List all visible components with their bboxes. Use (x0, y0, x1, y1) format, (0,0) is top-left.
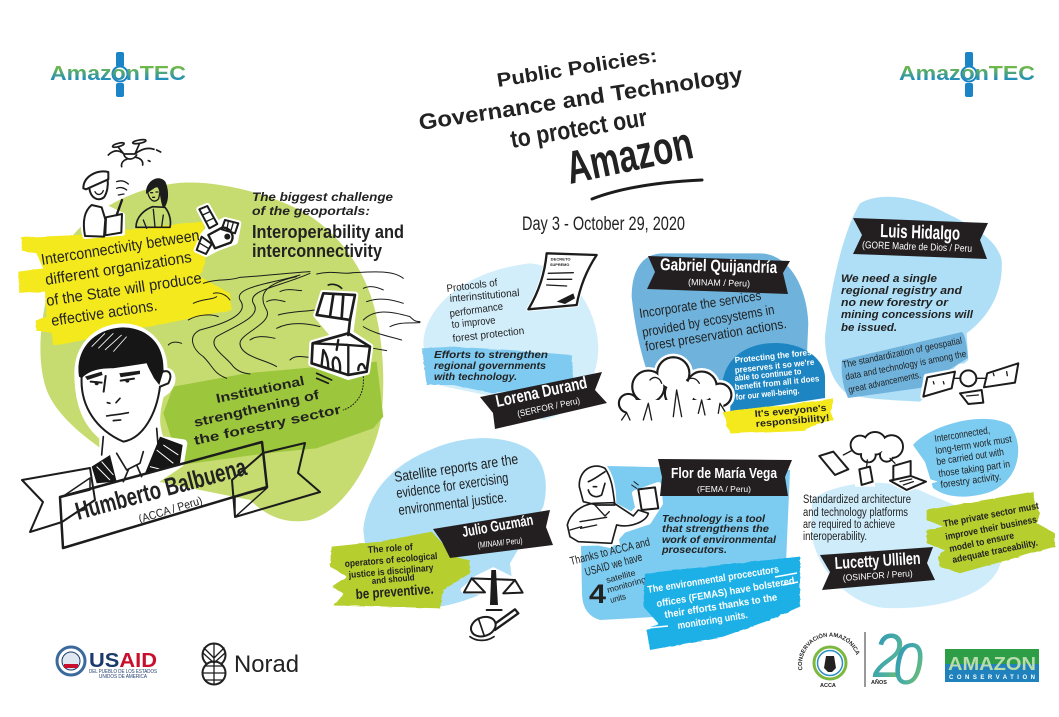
highlight: standardization: The standardization of geospatial (841, 335, 963, 371)
logo: Conservación Amazónica ACCA (798, 622, 923, 697)
panel: Lucetty Ullilen (803, 419, 1055, 608)
logo: Conservación Amazónica ACCA: 0 (893, 632, 923, 697)
yellow highlight: responsibility: It's everyone's (754, 403, 827, 420)
name banner (433, 510, 553, 558)
dark blue callout (722, 343, 825, 412)
landscape with rivers (168, 272, 420, 378)
blue blob (632, 253, 808, 420)
name: Humberto Balbuena (72, 453, 250, 526)
icon: decree document: SUPREMO (550, 263, 570, 267)
highlight: standardization: great advancements. (847, 370, 922, 396)
logo: Conservación Amazónica ACCA: AÑOS (871, 679, 887, 686)
highlight: standardization (841, 332, 968, 398)
ribbon banner (22, 442, 320, 548)
icon: satellite (923, 363, 1018, 404)
text: protocols: Protocols of (446, 277, 498, 295)
name: Humberto Balbuena: (ACCA / Peru) (137, 495, 204, 526)
name banner: Julio Guzmán (461, 512, 535, 541)
logo: Conservación Amazónica ACCA: 2 (872, 622, 903, 691)
icon: cloud and connected devices (819, 432, 927, 490)
logo: AmazonTEC right: AmazonTEC (899, 63, 1035, 85)
text: protocols: interinstitutional (449, 287, 520, 305)
green highlight: private sector: improve their business (944, 514, 1038, 543)
text: standardized architecture: and technology platforms (803, 507, 908, 519)
green blob background (40, 182, 383, 521)
cyan highlight: environmental offices: monitoring units. (677, 610, 749, 632)
yellow highlight: responsibility (723, 398, 833, 433)
text: protocols: to improve (451, 314, 496, 331)
logo: AmazonTEC left: AmazonTEC (50, 63, 186, 85)
panel: Humberto Balbuena (18, 139, 420, 548)
text: institutional strengthening: Institutional (215, 373, 306, 406)
text: technology tool: work of environmental (662, 535, 776, 546)
name banner: (MINAM/ Peru) (477, 535, 523, 550)
panel: Julio Guzmán (330, 438, 553, 640)
green highlight: ecological justice: and should (371, 572, 415, 586)
text: standardized architecture: interoperability. (803, 531, 867, 543)
text: satellite reports: evidence for exercising (395, 470, 509, 502)
name banner: (OSINFOR / Peru) (842, 568, 913, 583)
text: geoportals challenge (252, 192, 404, 261)
text: protecting the forest: Protecting the forest (734, 347, 815, 365)
cyan highlight: environmental offices: their efforts thanks to the (664, 592, 778, 621)
text: standardized architecture: are required to achieve (803, 519, 895, 531)
logo: USAID: DEL PUEBLO DE LOS ESTADOS (89, 669, 158, 675)
text: regional governments: Efforts to strengthen (434, 350, 548, 361)
name banner: (GORE Madre de Dios / Peru (862, 240, 972, 255)
text: standardized architecture (803, 494, 911, 543)
text: protecting the forest: for our well-being. (735, 385, 800, 402)
name banner: Flor de María Vega (671, 465, 778, 482)
logo: Amazon Conservation: CONSERVATION (949, 675, 1035, 681)
green highlight: private sector: model to ensure (948, 530, 1015, 555)
icon: gavel (468, 608, 518, 640)
icon: scales of justice (463, 570, 523, 610)
panel: Lorena Durand (422, 253, 607, 429)
text: protocols: performance (449, 301, 504, 320)
title: to protect our (508, 103, 649, 154)
text: protecting the forest: benefit from all it does (734, 373, 820, 392)
text: institutional strengthening: strengthening of (192, 387, 321, 430)
blue blob (581, 466, 790, 620)
text: technology tool: that strengthens the (662, 524, 769, 535)
dark green band (163, 362, 383, 465)
text: interconnected work (934, 425, 1013, 491)
text: interconnectivity statement (40, 227, 203, 330)
name banner (647, 255, 790, 294)
text: monitoring units: satellite (605, 567, 637, 585)
text: technology tool (661, 514, 776, 556)
text: monitoring units: 4 (589, 579, 606, 609)
name banner: (FEMA / Peru) (697, 484, 751, 494)
logo: Norad: Norad (234, 651, 299, 678)
text: geoportals challenge: of the geoportals: (252, 206, 370, 218)
icon: woman with tablet (567, 466, 660, 545)
logo: Conservación Amazónica ACCA: ACCA (820, 683, 836, 689)
text: geoportals challenge: interconnectivity (252, 240, 383, 261)
icon: technician with tablet (83, 171, 128, 237)
speech bubble (913, 419, 1018, 497)
text: standardized architecture: Standardized architecture (803, 494, 911, 506)
logo: Norad (202, 644, 299, 684)
text: regional governments (434, 350, 548, 383)
panel: Gabriel Quijandría (619, 253, 833, 433)
icon: satellite (197, 206, 238, 254)
text: protecting the forest: able to continue to (734, 366, 802, 383)
cyan highlight: environmental offices (643, 557, 800, 650)
text: regional registry: be issued. (841, 322, 897, 334)
date: Day 3 - October 29, 2020 (522, 214, 685, 235)
text: monitoring units: monitoring (606, 574, 647, 595)
panel: Flor de María Vega (567, 459, 800, 650)
text: regional registry: We need a single (841, 273, 937, 285)
green highlight: ecological justice: The role of (367, 542, 414, 556)
logo: AmazonTEC left (50, 52, 186, 97)
text: monitoring units: units (609, 591, 627, 605)
text: technology tool: prosecutors. (661, 545, 727, 556)
icon: drone (108, 139, 161, 167)
green highlight: private sector: The private sector must (942, 500, 1041, 530)
text: technology tool: Technology is a tool (662, 514, 765, 525)
icon: decree document: DECRETO (551, 257, 571, 261)
name banner: (MINAM / Peru) (688, 277, 750, 289)
green highlight: ecological justice (330, 532, 470, 608)
text: regional governments: with technology. (434, 372, 517, 383)
highlight band (422, 347, 573, 393)
text: regional registry: regional registry and (841, 285, 962, 297)
text: protocols (446, 277, 525, 345)
logo: Amazon Conservation (945, 649, 1039, 682)
text: interconnected work: be carried out with (936, 447, 1005, 468)
title: Public Policies: (495, 45, 659, 92)
text: protecting the forest: preserves it so we're (734, 357, 815, 375)
name banner: Luis Hidalgo (880, 221, 961, 245)
cyan highlight: environmental offices: offices (FEMAS) have bolstered (656, 576, 796, 610)
text: interconnectivity statement: of the State will produce (45, 270, 203, 310)
text: satellite reports: environmental justice. (398, 490, 508, 519)
portrait of Humberto Balbuena (78, 327, 183, 493)
text: interconnected work: long-term work must (935, 434, 1013, 457)
text: geoportals challenge: Interoperability and (252, 221, 404, 242)
yellow highlight: responsibility: responsibility! (755, 413, 830, 430)
text: regional registry (841, 273, 974, 334)
text: satellite reports (393, 452, 519, 519)
text: institutional strengthening (192, 373, 342, 448)
name banner: (SERFOR / Peru) (516, 395, 581, 419)
text: interconnectivity statement: different organizations (44, 249, 193, 289)
title: Amazon (561, 116, 697, 194)
logo: Conservación Amazónica ACCA: CONSERVACIÓN AMAZÓNICA (798, 632, 860, 670)
text: ecosystem services: Incorporate the services (638, 288, 762, 321)
text: satellite reports: Satellite reports are the (393, 452, 519, 486)
name banner (853, 218, 988, 259)
text: ecosystem services (638, 288, 788, 354)
green highlight: private sector (927, 492, 1055, 573)
green highlight: ecological justice: justice is disciplinary (347, 563, 435, 581)
logo: USAID: USAID (89, 650, 157, 672)
name: Humberto Balbuena: Humberto Balbuena (72, 453, 250, 526)
logo: AmazonTEC right (899, 52, 1035, 97)
text: interconnected work: those taking part in (938, 459, 1011, 480)
title: Governance and Technology (417, 62, 745, 135)
text: protecting the forest (734, 347, 820, 402)
blue blob (825, 197, 1002, 402)
name banner: Lucetty Ullilen (834, 549, 921, 573)
text: protocols: forest protection (452, 325, 525, 345)
text: ecosystem services: forest preservation actions. (644, 316, 788, 354)
highlight: standardization: data and technology is among the (844, 349, 967, 383)
text: monitoring units (569, 536, 651, 609)
text: institutional strengthening: the forestry sector (192, 402, 342, 448)
yellow highlight (18, 222, 232, 346)
name banner: Gabriel Quijandría (660, 255, 778, 277)
text: monitoring units: Thanks to ACCA and (569, 536, 651, 568)
green highlight: private sector: adequate traceability. (951, 538, 1039, 566)
blue blob (363, 438, 546, 607)
icon: forestry building with flag (312, 284, 370, 410)
text: geoportals challenge: The biggest challenge (252, 192, 394, 204)
text: regional registry: mining concessions will (841, 309, 974, 321)
text: monitoring units: USAID we have (584, 552, 644, 579)
text: regional governments: regional governments (434, 361, 546, 372)
name banner (658, 459, 792, 496)
icon: decree document (528, 253, 597, 309)
name banner (820, 547, 935, 590)
light blue blob (811, 483, 1002, 608)
name banner (480, 372, 607, 429)
text: regional registry: no new forestry or (841, 297, 949, 309)
light blue blob (423, 263, 598, 420)
icon: trees (619, 357, 731, 420)
text: interconnectivity statement: effective actions. (50, 297, 158, 330)
icon: woman listening (136, 178, 170, 228)
logo: Amazon Conservation: AMAZON (948, 654, 1036, 674)
text: ecosystem services: provided by ecosystems in (641, 302, 775, 340)
text: interconnected work: forestry activity. (940, 472, 1002, 491)
title (417, 45, 745, 199)
logo: USAID: UNIDOS DE AMERICA (99, 674, 148, 680)
panel: Luis Hidalgo (825, 197, 1018, 404)
logo: USAID (57, 647, 158, 680)
text: interconnected work: Interconnected, (934, 425, 991, 445)
green highlight: ecological justice: operators of ecological (344, 551, 438, 570)
green highlight: ecological justice: be preventive. (355, 581, 434, 602)
cyan highlight: environmental offices: The environmental procecutors (647, 564, 780, 596)
name banner: Lorena Durand (494, 373, 589, 411)
text: interconnectivity statement: Interconnectivity between (40, 227, 201, 269)
